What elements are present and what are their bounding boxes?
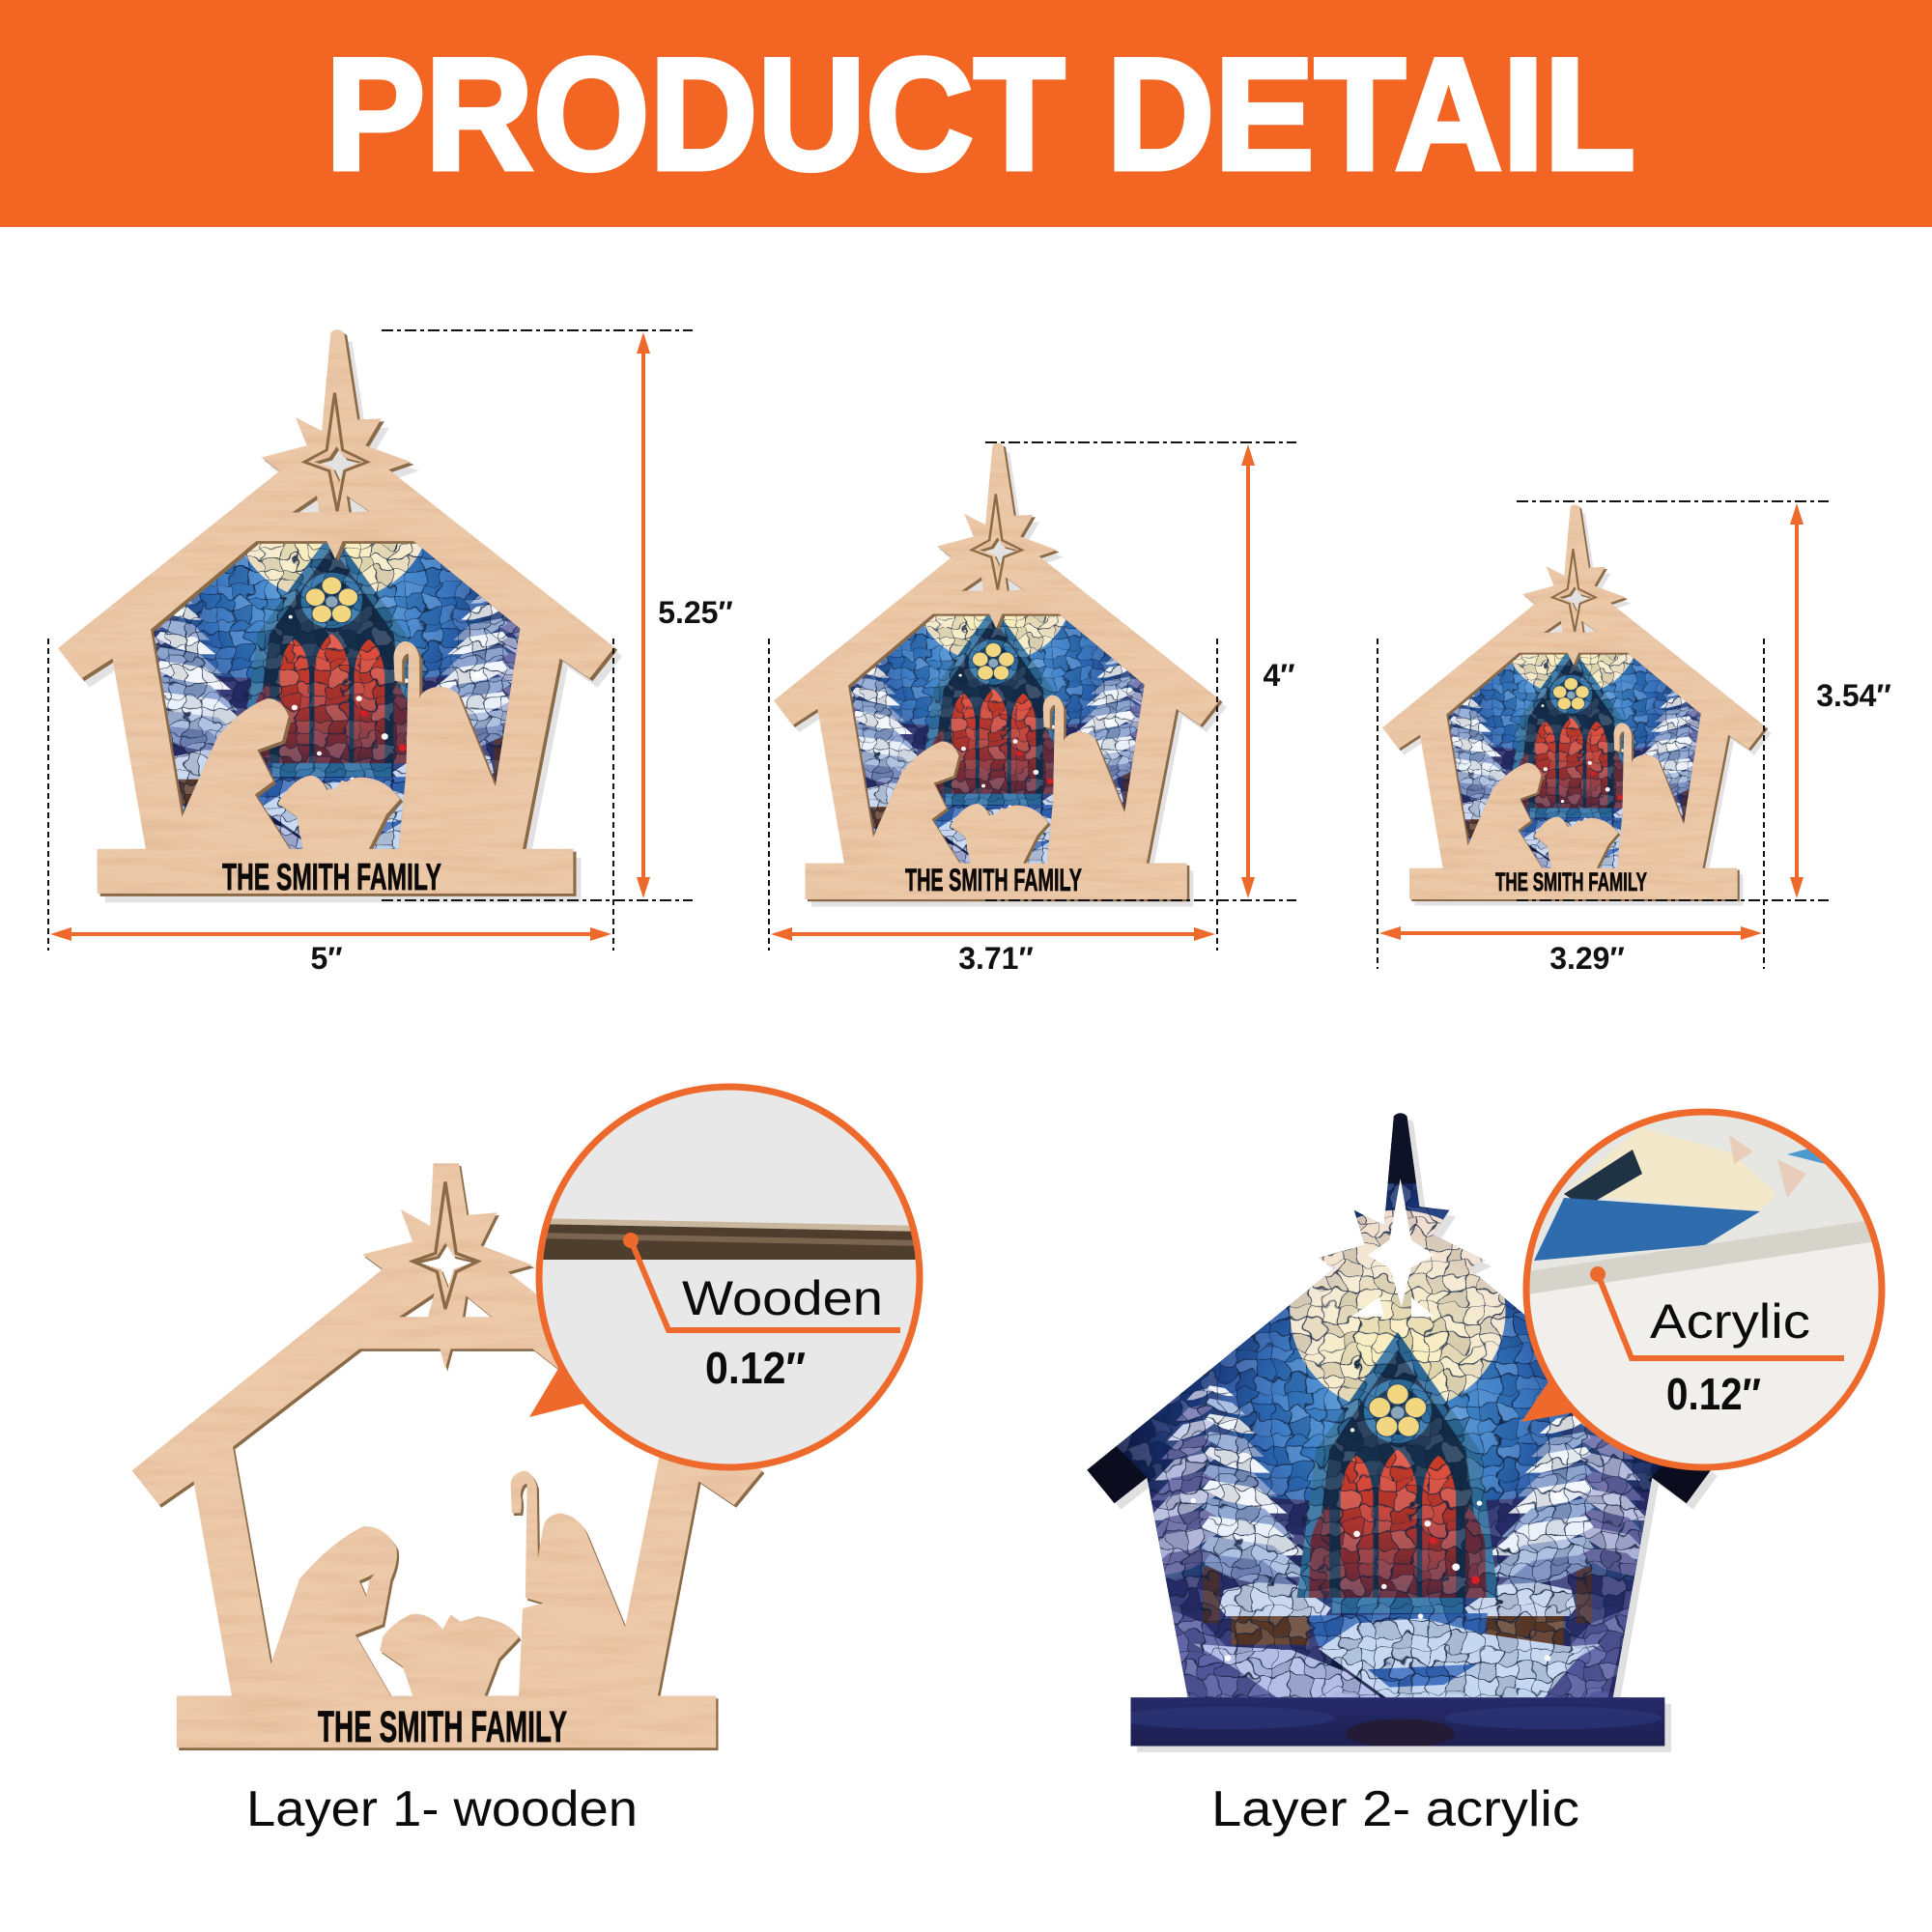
ornament: large size: THE SMITH FAMILY	[222, 857, 441, 898]
dimensions: large size: 5″	[310, 941, 343, 976]
dimensions: small size	[1378, 501, 1891, 976]
dimensions: medium size	[769, 442, 1296, 976]
layer 1: wooden cutout: THE SMITH FAMILY	[318, 1702, 567, 1751]
ornament: small size: THE SMITH FAMILY	[1495, 867, 1647, 896]
callout pointer: wooden	[529, 1362, 591, 1417]
dimensions: medium size: 3.71″	[958, 941, 1034, 976]
caption: layer 1: Layer 1- wooden	[246, 1781, 638, 1837]
ornament: small size	[1382, 504, 1772, 906]
header banner: PRODUCT DETAIL	[326, 25, 1635, 203]
dimensions: large size: 5.25″	[658, 595, 733, 630]
ornament: medium size	[774, 442, 1227, 906]
callout lens: wooden thickness: Wooden	[682, 1271, 883, 1325]
ornament: large size	[58, 329, 622, 902]
callout lens: acrylic thickness: 0.12″	[1666, 1369, 1761, 1419]
layer 2: acrylic stained glass panel	[1088, 1113, 1718, 1752]
dimensions: large size	[48, 330, 733, 976]
callout lens: wooden thickness: 0.12″	[705, 1343, 806, 1393]
ornament: medium size: THE SMITH FAMILY	[905, 863, 1082, 897]
header banner	[0, 0, 1932, 227]
layer 1: wooden cutout	[132, 1163, 764, 1751]
callout pointer: acrylic	[1521, 1372, 1575, 1422]
dimensions: small size: 3.54″	[1816, 678, 1891, 713]
callout lens: acrylic thickness: Acrylic	[1650, 1294, 1810, 1349]
callout lens: acrylic thickness	[1517, 1101, 1893, 1478]
dimensions: small size: 3.29″	[1549, 941, 1625, 976]
caption: layer 2: Layer 2- acrylic	[1211, 1781, 1579, 1837]
callout lens: wooden thickness	[536, 1087, 927, 1467]
dimensions: medium size: 4″	[1263, 658, 1295, 693]
